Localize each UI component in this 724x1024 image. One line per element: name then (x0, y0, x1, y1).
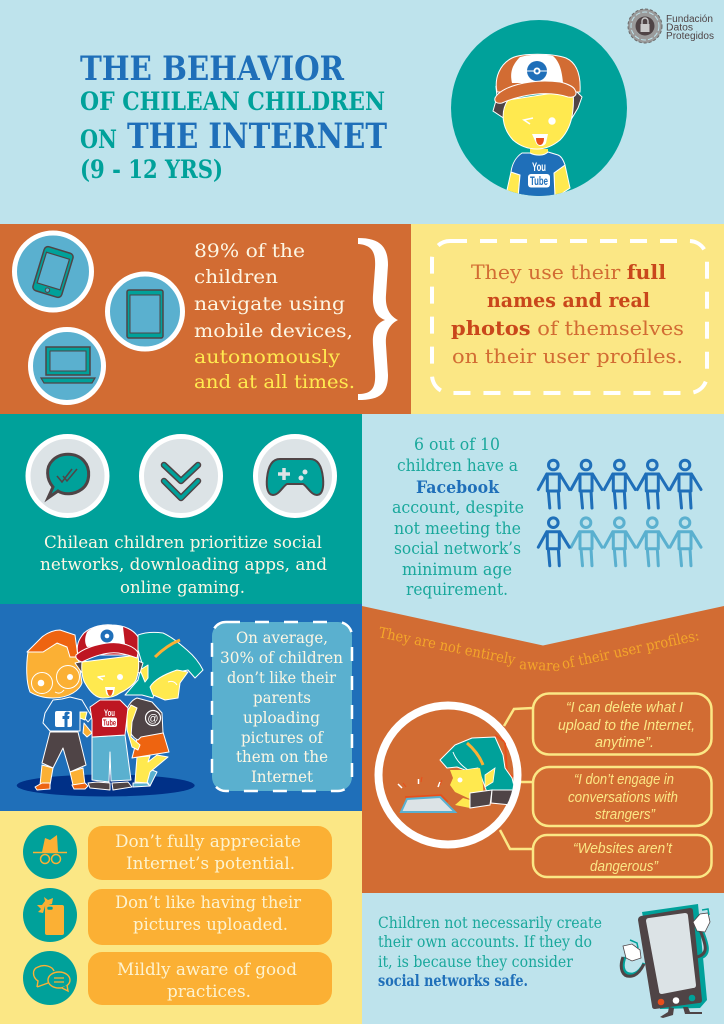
callout: strangers: conversations with (568, 790, 678, 806)
pill: pictures (88, 889, 332, 945)
logo: Fundación Datos Protegidos: Protegidos (666, 31, 714, 42)
text: prioritize social networks (40, 533, 327, 598)
icon: download chevrons (142, 436, 220, 516)
callout: websites: dangerous” (590, 859, 659, 875)
illustration: boy in circle: You (532, 160, 546, 174)
text: full names and real photos: photos of themselves (451, 316, 684, 340)
text: 6 out of 10: minimum age (402, 560, 512, 579)
text: full names and real photos: on their user profiles. (452, 344, 683, 368)
text: prioritize social networks: networks, downloading apps, and (40, 555, 327, 575)
callout: websites: “Websites aren’t (573, 841, 673, 857)
icon: curly brace (358, 238, 398, 400)
icon: chat (28, 436, 107, 516)
text: 6 out of 10 (392, 435, 524, 599)
pill: pictures: Don’t like having their (115, 893, 302, 913)
pill: good practices (88, 952, 332, 1005)
boy with red cap: You (104, 708, 115, 718)
panel: parents uploading (0, 604, 362, 811)
callout: 30% of children: pictures of (241, 728, 324, 747)
girl (125, 632, 203, 787)
heading: not entirely aware: of their user profiles: (561, 628, 701, 673)
heading: not entirely aware (377, 625, 701, 675)
text: prioritize social networks: Chilean children prioritize social (44, 533, 322, 553)
text: children not necessarily create: social networks safe. (378, 971, 528, 990)
logo: Fundación Datos Protegidos: Fundación (666, 14, 713, 25)
connectors (500, 708, 533, 849)
logo: Fundación Datos Protegidos (628, 9, 714, 43)
chart: pictogram people, 6 of 10 (538, 460, 701, 566)
title: THE INTERNET (127, 116, 387, 157)
text: 89% of the children (194, 240, 355, 393)
boy with red cap: Tube (103, 718, 116, 728)
panel: accounts (362, 893, 724, 1024)
boy with red cap (75, 625, 143, 790)
icon: chat bubbles (23, 951, 77, 1005)
callout: strangers: strangers” (595, 807, 656, 823)
pill: potential (88, 826, 332, 880)
panel: perceptions (0, 811, 362, 1024)
panel: user profiles (362, 606, 724, 893)
text: 6 out of 10: children have a (397, 456, 518, 475)
icon: game controller (256, 436, 334, 516)
callout: delete: anytime”. (595, 735, 654, 751)
text: 6 out of 10: requirement. (406, 580, 508, 599)
text: children not necessarily create: their own accounts. If they do (378, 933, 592, 951)
boy with glasses (27, 630, 92, 790)
panel: facebook (362, 414, 724, 606)
heading: not entirely aware: aware (519, 657, 561, 675)
title (80, 49, 387, 184)
text: full names and real photos (451, 260, 684, 368)
panel: header (80, 8, 714, 196)
pill: potential: Internet’s potential. (126, 854, 295, 874)
callout: delete: “I can delete what I (566, 700, 683, 716)
title: (9 - 12 YRS) (80, 155, 223, 184)
text: 89% of the children: autonomously (194, 346, 340, 368)
text: children not necessarily create (378, 914, 602, 990)
callout: delete (533, 694, 712, 754)
title: THE BEHAVIOR (80, 49, 345, 89)
icon: laptop (30, 330, 104, 402)
text: children not necessarily create: Children not necessarily create (378, 914, 602, 932)
callout: 30% of children: On average, (236, 628, 328, 647)
icon: incognito (23, 825, 77, 879)
icon: selfie phone (23, 888, 77, 942)
pill: potential: Don’t fully appreciate (115, 832, 301, 852)
illustration: phone character (621, 904, 710, 1018)
illustration: boy in circle (451, 20, 627, 198)
panel: full names (411, 224, 724, 414)
callout: delete: upload to the Internet, (558, 718, 695, 734)
logo: Fundación Datos Protegidos: Datos (666, 22, 693, 34)
text: 89% of the children: navigate using (194, 293, 345, 315)
callout: 30% of children: don’t like their (227, 668, 336, 687)
callout: strangers: “I don’t engage in (574, 772, 674, 788)
callout: 30% of children: Internet (251, 767, 314, 786)
title: OF CHILEAN CHILDREN (80, 87, 385, 116)
illustration: boy in circle: Tube (530, 174, 548, 188)
text: full names and real photos: names and real (487, 288, 650, 312)
callout: 30% of children (212, 622, 352, 791)
text: 89% of the children: 89% of the (194, 240, 305, 262)
pill: good practices: practices. (167, 982, 251, 1002)
text: prioritize social networks: online gaming. (120, 578, 245, 598)
callout: 30% of children: them on the (236, 747, 328, 766)
callout: 30% of children: parents (253, 688, 311, 707)
text: 6 out of 10: account, despite (392, 498, 524, 517)
callout: websites (533, 835, 712, 877)
text: 6 out of 10: 6 out of 10 (414, 435, 500, 454)
shadow ellipse (17, 774, 195, 796)
text: 6 out of 10: social network’s (394, 539, 521, 558)
text: 89% of the children: and at all times. (194, 371, 355, 393)
illustration: child looking at tablet (378, 706, 518, 844)
girl: @ (147, 713, 159, 725)
glasses (32, 666, 80, 694)
text: full names and real photos: They use their full (471, 260, 666, 284)
callout: strangers (533, 767, 712, 826)
text: 6 out of 10: Facebook (416, 478, 500, 497)
text: 89% of the children: mobile devices, (194, 320, 353, 342)
text: 6 out of 10: not meeting the (394, 519, 521, 538)
icon: tablet (108, 274, 182, 349)
title: ON (80, 125, 117, 154)
pill: pictures: pictures uploaded. (133, 915, 288, 935)
icon: facebook (55, 711, 72, 727)
heading: not entirely aware: They are not entirely (377, 625, 517, 669)
callout: 30% of children: 30% of children (220, 648, 343, 667)
panel: priorities (0, 414, 362, 604)
text: 89% of the children: children (194, 266, 278, 288)
icon: phone (14, 233, 92, 310)
illustration: three children (27, 625, 203, 790)
callout: 30% of children: uploading (243, 708, 320, 727)
pill: good practices: Mildly aware of good (117, 960, 297, 980)
panel: mobile devices (0, 224, 411, 414)
text: children not necessarily create: it, is because they consider (378, 953, 574, 971)
